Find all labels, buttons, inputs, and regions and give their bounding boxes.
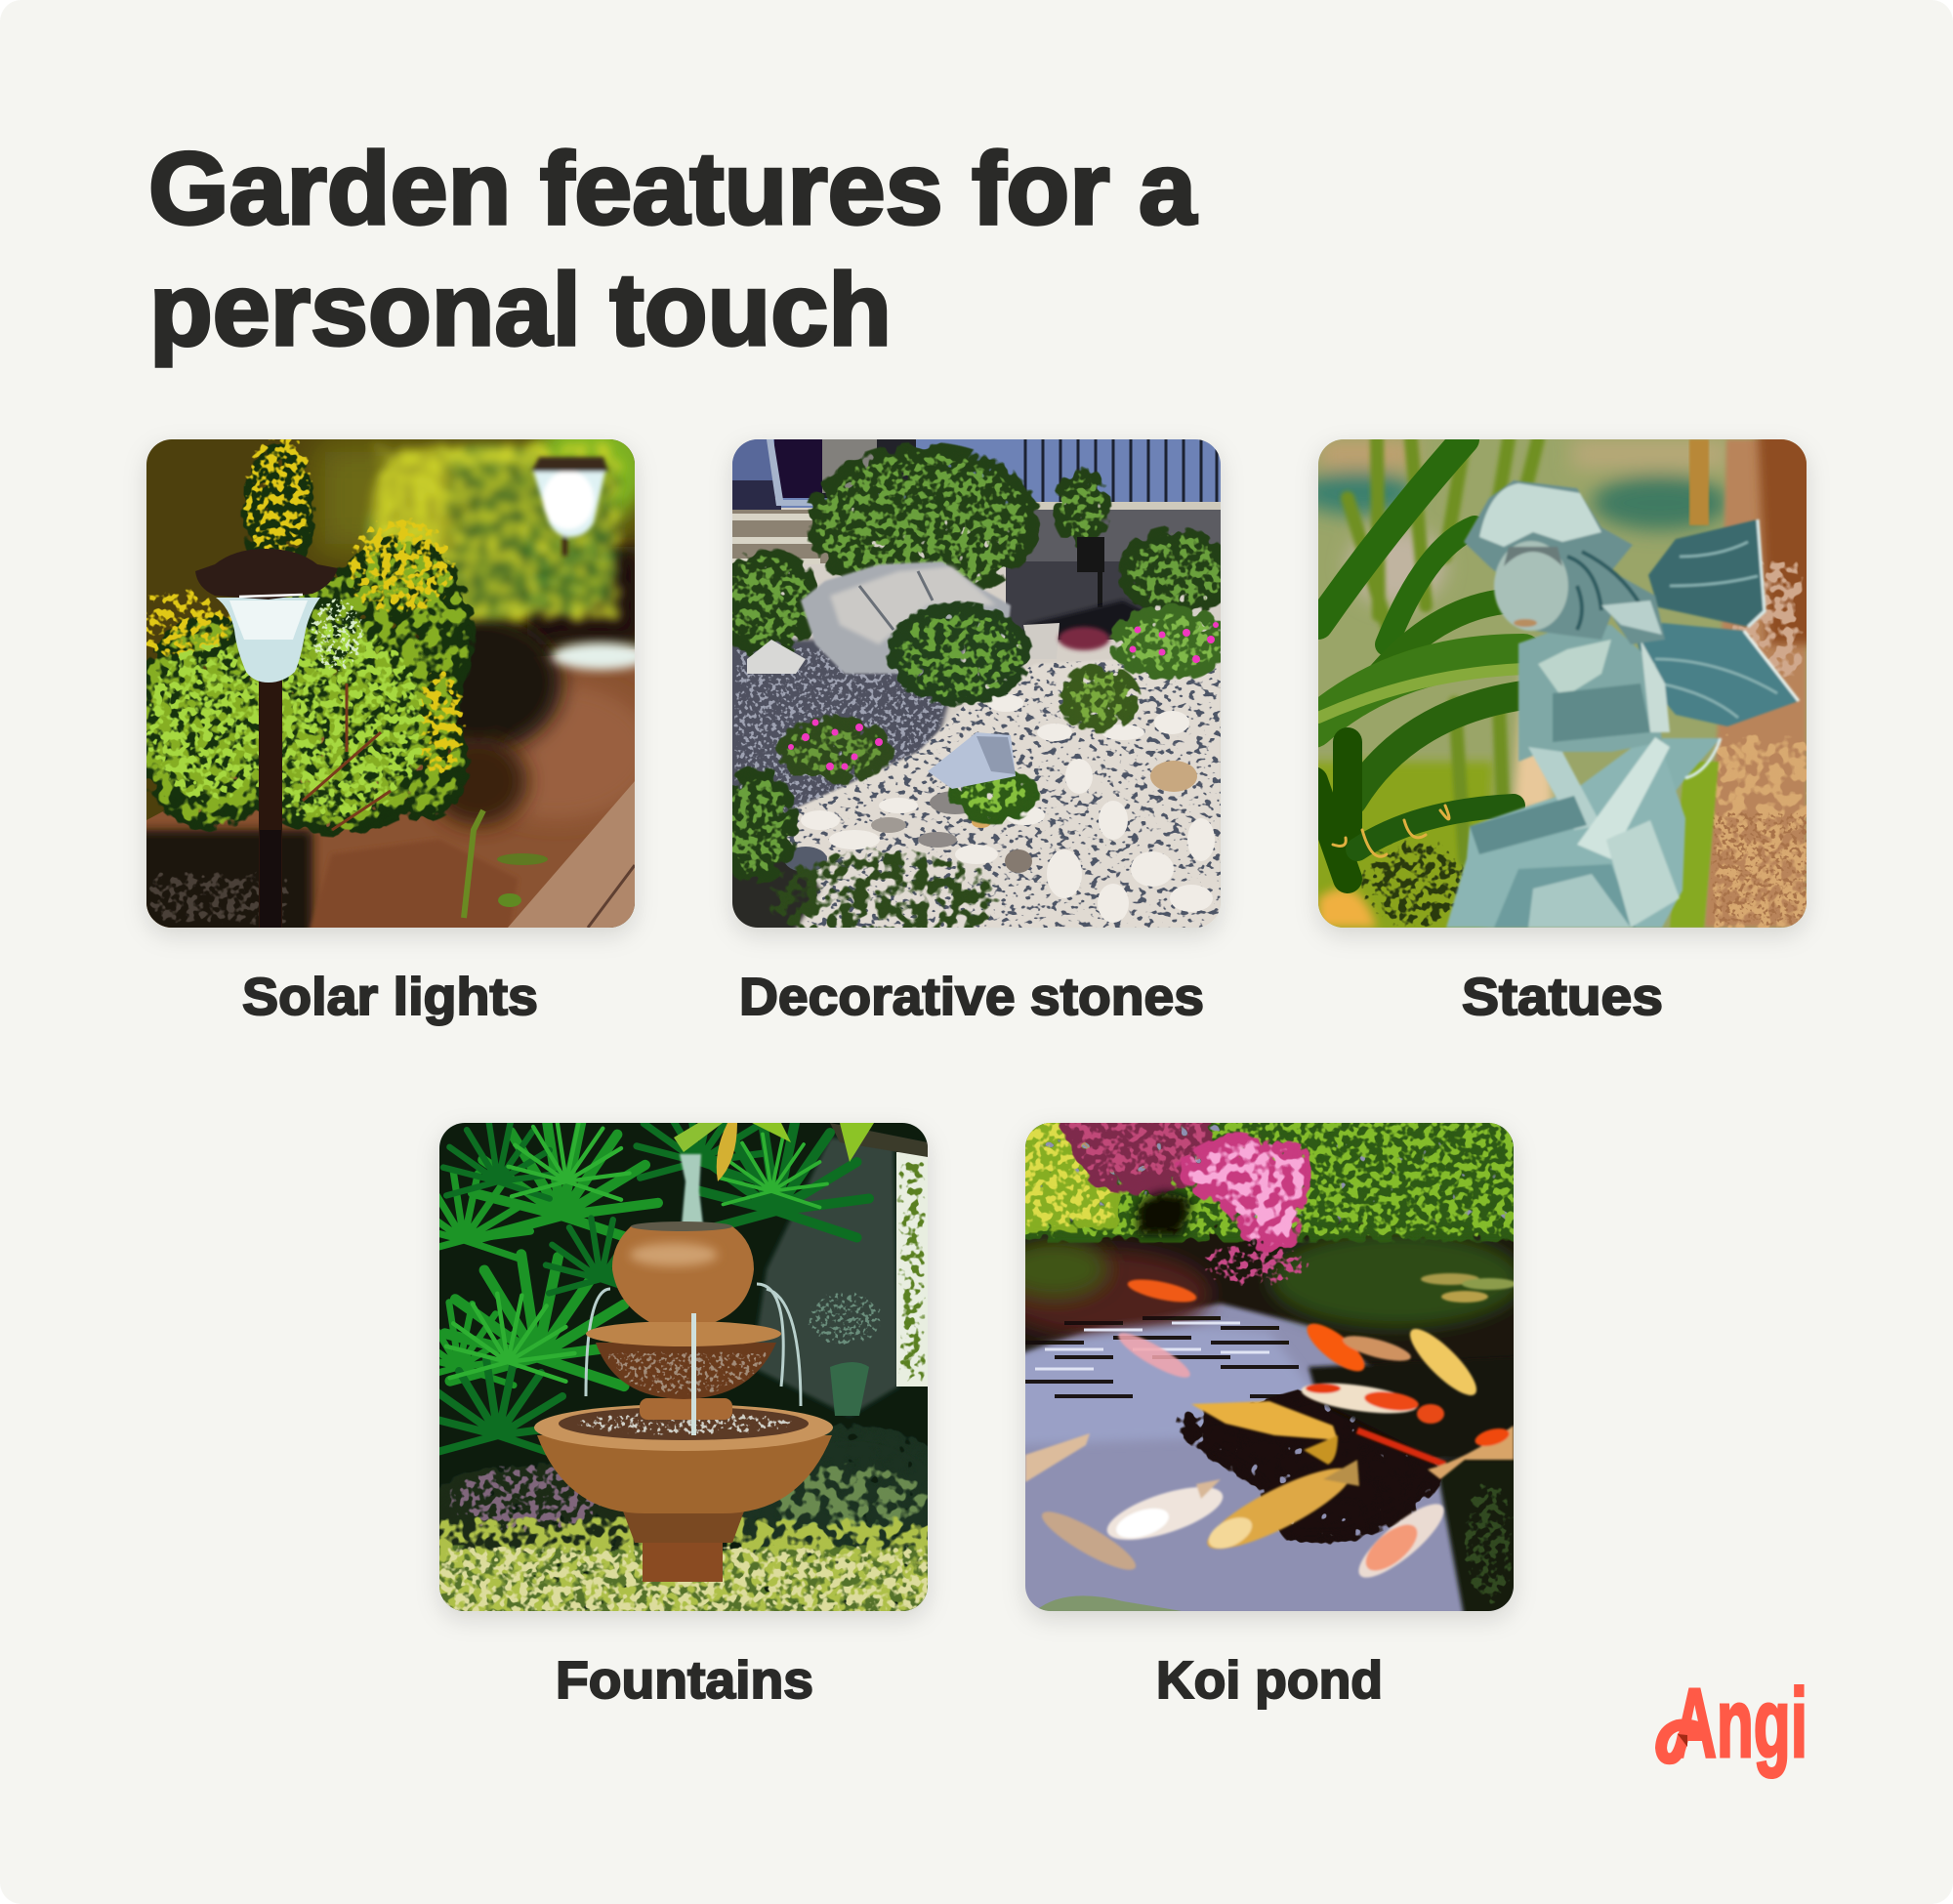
fountain [534, 1154, 833, 1582]
label: Solar lights [242, 968, 538, 1026]
panel: decorative stones [713, 439, 1235, 1026]
photo: solar lights [139, 439, 643, 943]
hand drawn stones [801, 694, 1215, 923]
title: personal touch [149, 253, 892, 367]
logo: Angi [1661, 1669, 1808, 1778]
panel: fountains [400, 1094, 967, 1710]
big bowl [537, 1435, 832, 1513]
head [1464, 480, 1665, 644]
bottom stem [643, 1513, 723, 1582]
label: Koi pond [1156, 1651, 1383, 1710]
label: Statues [1462, 968, 1663, 1026]
photo: koi pond [996, 1113, 1523, 1621]
water jet [680, 1154, 703, 1225]
title [148, 132, 1198, 367]
logo: Angi: Angi [1673, 1669, 1808, 1778]
icon: far lamp [531, 457, 608, 556]
label: Decorative stones [739, 968, 1204, 1026]
photo: statues [1299, 430, 1816, 937]
icon: path lamp [1077, 537, 1104, 607]
photo: fountains [400, 1094, 967, 1626]
panel: koi pond [996, 1113, 1523, 1710]
bush [132, 444, 474, 835]
photo: decorative stones [713, 439, 1235, 952]
middle bowl [596, 1343, 776, 1399]
pink flowers [788, 622, 1219, 770]
panel: statues [1299, 430, 1816, 1026]
label: Fountains [556, 1651, 813, 1710]
foliage [1016, 1113, 1523, 1240]
gray rock [928, 732, 1016, 789]
shrubs [887, 603, 1031, 705]
lily pads [1421, 1273, 1479, 1285]
koi fish [1025, 1273, 1517, 1588]
icon: near lamp [195, 549, 338, 928]
title: Garden features for a [148, 132, 1198, 246]
top pot [612, 1226, 754, 1322]
statue [1446, 480, 1799, 928]
boulder [801, 561, 1011, 674]
panel: solar lights [122, 415, 654, 1026]
